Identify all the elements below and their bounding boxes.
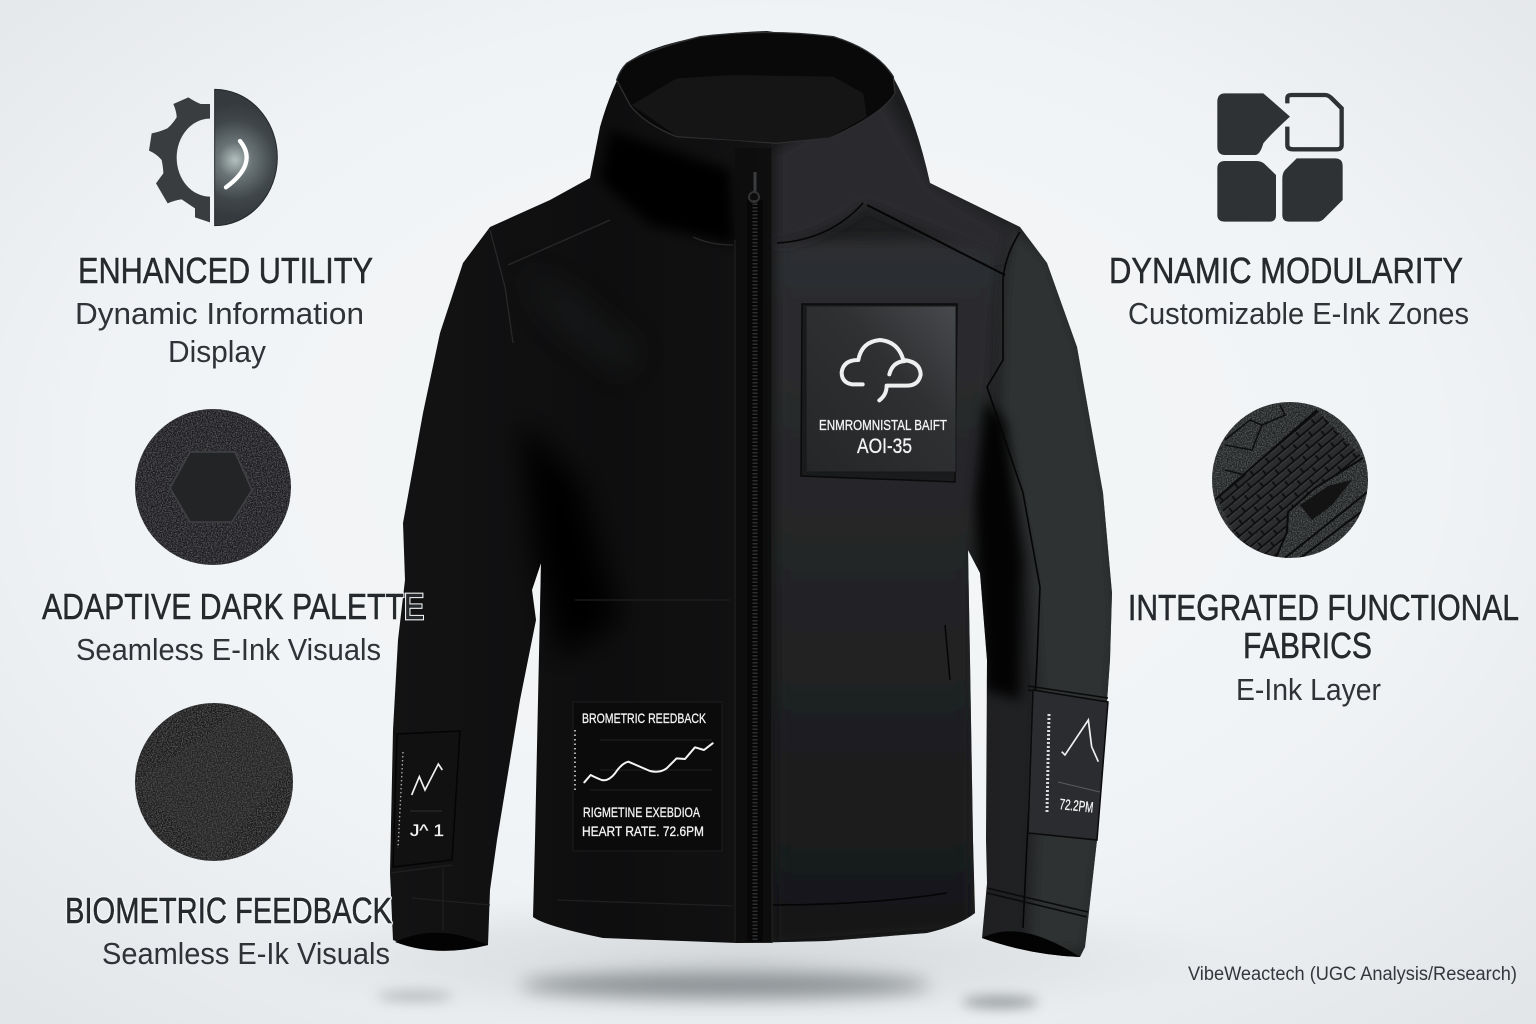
- heading: dynamic modularity: DYNAMIC MODULARITY: [1109, 250, 1463, 291]
- heading: enhanced utility: ENHANCED UTILITY: [78, 250, 373, 291]
- icon: fabric swatch fleece: [135, 703, 295, 861]
- hood inner lining: [632, 75, 867, 143]
- panel: biometric display: [573, 702, 722, 851]
- heading: biometric feedback: [65, 890, 392, 971]
- zipper: [735, 148, 772, 943]
- floor shadow: [377, 972, 1038, 1008]
- jacket silhouette: [390, 31, 1112, 957]
- heading: adaptive dark palette: Seamless E-Ink Visuals: [76, 632, 381, 667]
- icon: fabric swatch circuit: [1212, 402, 1370, 562]
- seams: [773, 203, 1108, 928]
- line chart: [584, 743, 713, 782]
- heading: biometric feedback: Seamless E-Ik Visuals: [102, 936, 390, 971]
- heading: integrated functional fabrics: E-Ink Layer: [1236, 672, 1381, 707]
- heading: adaptive dark palette: ADAPTIVE DARK PALETTE: [42, 586, 424, 627]
- icon: gear with half moon: [149, 89, 277, 226]
- panel: left sleeve display: [393, 731, 460, 867]
- heading: enhanced utility: Dynamic Information: [75, 296, 364, 331]
- panel: chest e-ink display: [801, 304, 957, 482]
- icon: cloud: [842, 340, 921, 400]
- heading: enhanced utility: [75, 250, 373, 369]
- heading: adaptive dark palette: [42, 586, 424, 667]
- panel: biometric display: HEART RATE. 72.6PM: [582, 823, 704, 839]
- icon: modular zones: [1217, 93, 1343, 222]
- left cuff opening: [395, 933, 488, 951]
- panel: left sleeve display: J^ 1: [410, 821, 444, 840]
- source credit: VibeWeactech (UGC Analysis/Research): [1188, 964, 1517, 985]
- panel: chest e-ink display: AOI-35: [857, 435, 912, 458]
- heading: integrated functional fabrics: [1128, 587, 1519, 707]
- heading: dynamic modularity: Customizable E-Ink Zones: [1128, 296, 1469, 331]
- panel heading: BROMETRIC REEDBACK: [582, 710, 706, 726]
- hood interior: [617, 32, 895, 143]
- panel: right sleeve display: [1028, 690, 1108, 840]
- dark side seams: [390, 220, 733, 930]
- jacket shading: [520, 90, 1115, 950]
- right cuff opening: [982, 931, 1080, 957]
- heading: dynamic modularity: [1109, 250, 1469, 331]
- icon: fabric swatch hexagon: [135, 409, 291, 565]
- heading: enhanced utility: Display: [168, 334, 266, 369]
- heading: biometric feedback: BIOMETRIC FEEDBACK: [65, 890, 392, 931]
- panel: right sleeve display: 72.2PM: [1059, 796, 1094, 817]
- heading: integrated functional fabrics: FABRICS: [1243, 625, 1372, 666]
- jacket: [390, 31, 1115, 957]
- chest panel text: ENMROMNISTAL BAIFT: [819, 418, 947, 434]
- readout text: RIGMETINE EXEBDIOA: [583, 804, 701, 820]
